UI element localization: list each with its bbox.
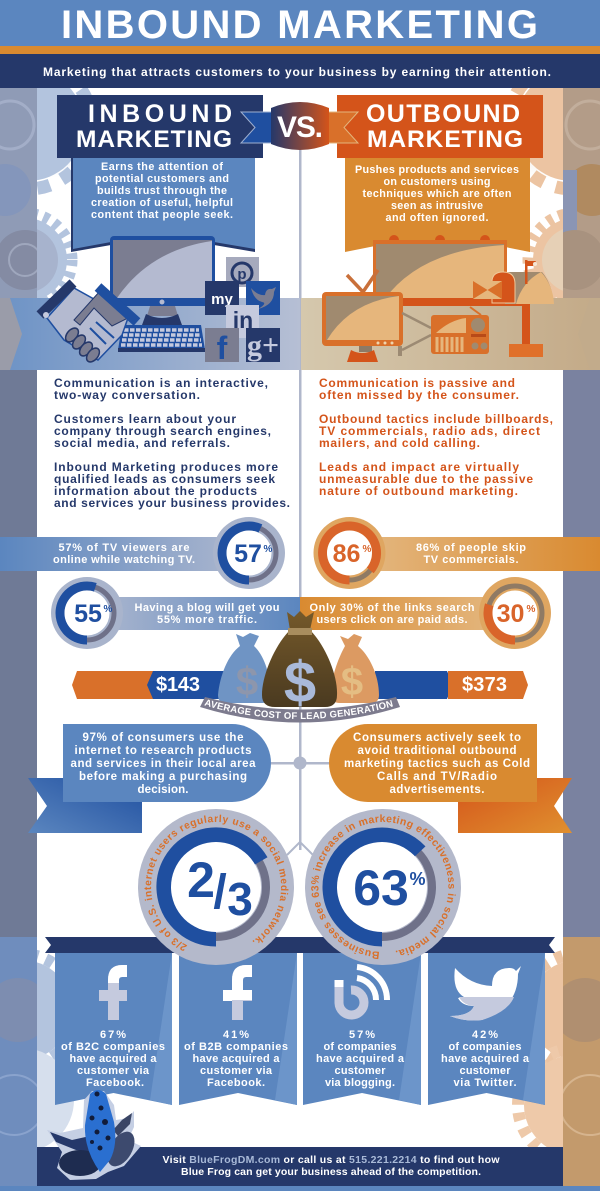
icon: social media squares: p — [237, 266, 247, 283]
callout: inbound local research: before making a purchasing — [79, 771, 247, 783]
footer bar — [37, 1147, 563, 1186]
subtitle bar: Marketing that attracts customers to your business by earning their attention. — [43, 65, 551, 79]
icon: facebook f — [223, 965, 252, 1020]
panel: blogging: customer — [334, 1065, 386, 1077]
panel: outbound description — [345, 158, 530, 252]
text block: outbound points — [319, 376, 553, 498]
stat: 86% skip commercials: 86% of people skip — [416, 542, 526, 554]
panel: facebook b2b: of B2B companies — [184, 1041, 288, 1053]
ribbon: outbound cost — [375, 671, 528, 699]
text block: outbound points: unmeasurable due to the passive — [319, 472, 533, 486]
panel: blogging: 57% — [349, 1029, 375, 1041]
panel: twitter: have acquired a — [441, 1053, 530, 1065]
icon: billboard — [373, 235, 523, 306]
circle stat: two thirds: / — [213, 866, 227, 919]
panel: outbound description: Pushes products and services — [355, 164, 519, 176]
arc banner: average cost of lead generation: AVERAGE COST OF LEAD GENERATION — [204, 700, 393, 719]
stat: 55% blog traffic — [51, 577, 300, 649]
stat: 55% blog traffic: 55% more traffic. — [157, 614, 257, 626]
banner: outbound marketing: OUTBOUND — [366, 100, 520, 128]
circle stat: 63 percent: Businesses see 63% increase in marketing effectiveness in social media. — [311, 814, 456, 960]
stat: 86% skip commercials: % — [363, 544, 372, 555]
panel: facebook b2b — [179, 953, 297, 1105]
panel: facebook b2b: Facebook. — [207, 1077, 265, 1089]
panel: facebook b2c: have acquired a — [70, 1053, 157, 1065]
panel: blogging: via blogging. — [325, 1077, 395, 1089]
stat: 86% skip commercials — [314, 517, 600, 589]
icon: social media squares — [205, 257, 280, 366]
panel: inbound description — [71, 158, 255, 252]
stat: 86% skip commercials: TV commercials. — [424, 554, 518, 566]
illustration band left — [10, 298, 300, 370]
left side strip — [0, 88, 37, 1186]
right side strip — [563, 88, 600, 1186]
ribbon: inbound cost — [72, 671, 225, 699]
decorative gears top left — [0, 61, 92, 307]
text block: inbound points: Customers learn about your — [54, 412, 236, 426]
panel: outbound description: techniques which are often — [362, 188, 512, 200]
banner: inbound marketing: MARKETING — [76, 126, 232, 153]
stat: 86% skip commercials: 86 — [333, 540, 360, 568]
text block: inbound points: company through search engines, — [54, 424, 271, 438]
icon: social media squares: my — [211, 291, 233, 308]
panel: inbound description: content that people seek. — [91, 209, 233, 221]
text block: inbound points: two-way conversation. — [54, 388, 200, 402]
stat: 30% paid ads: 30 — [497, 600, 524, 628]
banner: outbound marketing — [337, 95, 543, 158]
circle stat: 63 percent: % — [409, 869, 426, 889]
icon: social media squares: f — [217, 330, 228, 366]
panel: blogging — [303, 953, 421, 1105]
circle stat: two thirds: 3 — [227, 873, 253, 925]
text block: outbound points: Outbound tactics include billboards, — [319, 412, 553, 426]
vs badge — [241, 102, 358, 150]
footer bar: Visit BlueFrogDM.com or call us at 515.221.2214 to find out how — [162, 1154, 500, 1166]
text block: inbound points: social media, and referrals. — [54, 436, 230, 450]
panel: twitter: via Twitter. — [454, 1077, 516, 1089]
bottom strip — [0, 1186, 600, 1191]
icon: keyboard — [118, 325, 205, 352]
circle stat: two thirds: 2/3 of U.S. internet users regularly use a social media network. — [144, 814, 288, 951]
panel: facebook b2c: customer via — [77, 1065, 150, 1077]
icon: twitter bird — [450, 966, 521, 1020]
panel: outbound description: and often ignored. — [386, 212, 488, 224]
stat: 30% paid ads: users click on are paid ads. — [316, 614, 468, 626]
banner: outbound marketing: MARKETING — [367, 126, 523, 153]
panel: inbound description: Earns the attention of — [101, 161, 223, 173]
panel: facebook b2b: 41% — [223, 1029, 249, 1041]
callout: outbound avoidance — [329, 724, 572, 833]
icon: money bags: $ — [236, 660, 258, 704]
panel: facebook b2c: 67% — [100, 1029, 126, 1041]
icon: blog rss — [339, 967, 387, 1015]
text block: inbound points: Communication is an interactive, — [54, 376, 268, 390]
stat: 55% blog traffic: Having a blog will get you — [134, 602, 280, 614]
panel: twitter — [428, 953, 545, 1105]
callout: outbound avoidance: Consumers actively seek to — [353, 732, 521, 744]
connector dot — [271, 756, 329, 770]
stat: 57% tv viewers: % — [264, 544, 273, 555]
icon: social media squares: in — [233, 307, 253, 333]
callout: inbound local research: decision. — [138, 784, 188, 796]
panel: outbound description: seen as intrusive — [391, 200, 483, 212]
callout: outbound avoidance: avoid traditional outbound — [358, 745, 516, 757]
panel: blogging: of companies — [324, 1041, 396, 1053]
circle stat: 63 percent: 63 — [353, 860, 409, 916]
callout: inbound local research — [28, 724, 271, 833]
icon: radio — [398, 307, 489, 356]
stat: 57% tv viewers: 57% of TV viewers are — [58, 542, 190, 554]
navy header bar for company stats — [45, 937, 555, 953]
icon: facebook f — [99, 965, 127, 1020]
title: INBOUND MARKETING — [61, 3, 538, 47]
text block: inbound points — [54, 376, 290, 510]
panel: twitter: customer — [460, 1065, 511, 1077]
text block: inbound points: qualified leads as consumers seek — [54, 472, 275, 486]
footer bar: Blue Frog can get your business ahead of the competition. — [181, 1166, 481, 1178]
text block: outbound points: TV commercials, radio ads, direct — [319, 424, 540, 438]
panel: inbound description: builds trust through the — [97, 185, 227, 197]
decorative gears top right — [508, 61, 600, 307]
stat: 57% tv viewers: online while watching TV. — [53, 554, 195, 566]
icon: blue frog — [47, 1090, 141, 1180]
callout: inbound local research: 97% of consumers use the — [82, 732, 244, 744]
text block: outbound points: mailers, and cold calling. — [319, 436, 480, 450]
icon: money bags: $ — [341, 660, 363, 704]
icon: computer monitor — [110, 236, 215, 325]
text block: outbound points: Leads and impact are virtually — [319, 460, 519, 474]
callout: outbound avoidance: advertisements. — [390, 784, 484, 796]
decorative gears bottom right — [518, 954, 600, 1161]
stat: 30% paid ads: % — [527, 604, 536, 615]
panel: blogging: have acquired a — [316, 1053, 405, 1065]
panel: outbound description: on customers using — [384, 176, 490, 188]
callout: outbound avoidance: marketing tactics such as Cold — [344, 758, 530, 770]
banner: inbound marketing — [57, 95, 263, 158]
panel: inbound description: creation of useful, helpful — [91, 197, 233, 209]
callout: inbound local research: and services in their local area — [70, 758, 256, 770]
callout: outbound avoidance: Calls and TV/Radio — [377, 771, 497, 783]
subtitle bar — [0, 54, 600, 88]
panel: facebook b2b: customer via — [200, 1065, 273, 1077]
stat: 57% tv viewers: 57 — [234, 540, 262, 568]
stat: 57% tv viewers — [0, 517, 285, 589]
icon: mailbox — [473, 260, 554, 357]
callout: inbound local research: internet to research products — [74, 745, 252, 757]
circle stat: two thirds: 2 — [187, 852, 215, 908]
text block: outbound points: nature of outbound marketing. — [319, 484, 518, 498]
stat: 55% blog traffic: % — [104, 604, 113, 615]
text block: inbound points: Inbound Marketing produces more — [54, 460, 278, 474]
panel: facebook b2b: have acquired a — [192, 1053, 280, 1065]
stat: 55% blog traffic: 55 — [74, 600, 102, 628]
icon: television — [322, 270, 403, 362]
text block: outbound points: often missed by the consumer. — [319, 388, 519, 402]
header band — [0, 0, 600, 54]
icon: money bags — [218, 611, 379, 715]
ribbon: inbound cost: $143 — [156, 674, 200, 696]
stat: 30% paid ads — [300, 577, 551, 649]
stat: 30% paid ads: Only 30% of the links search — [310, 602, 475, 614]
panel: twitter: of companies — [448, 1041, 522, 1053]
panel: twitter: 42% — [472, 1029, 498, 1041]
text block: inbound points: information about the products — [54, 484, 257, 498]
decorative gears bottom left — [0, 954, 78, 1152]
text block: inbound points: and services your business provides. — [54, 496, 290, 510]
centre divider line — [287, 150, 313, 855]
panel: facebook b2c: Facebook. — [86, 1077, 144, 1089]
ribbon: outbound cost: $373 — [462, 674, 507, 696]
text block: outbound points: Communication is passive and — [319, 376, 515, 390]
icon: social media squares: g+ — [247, 329, 279, 362]
vs badge: VS. — [277, 111, 323, 144]
panel: facebook b2c: of B2C companies — [61, 1041, 165, 1053]
banner: inbound marketing: INBOUND — [88, 100, 232, 128]
icon: money bags: $ — [284, 650, 316, 715]
panel: inbound description: potential customers and — [95, 173, 229, 185]
icon: handshake — [40, 283, 137, 364]
panel: facebook b2c — [55, 953, 172, 1105]
illustration band right — [301, 298, 590, 370]
